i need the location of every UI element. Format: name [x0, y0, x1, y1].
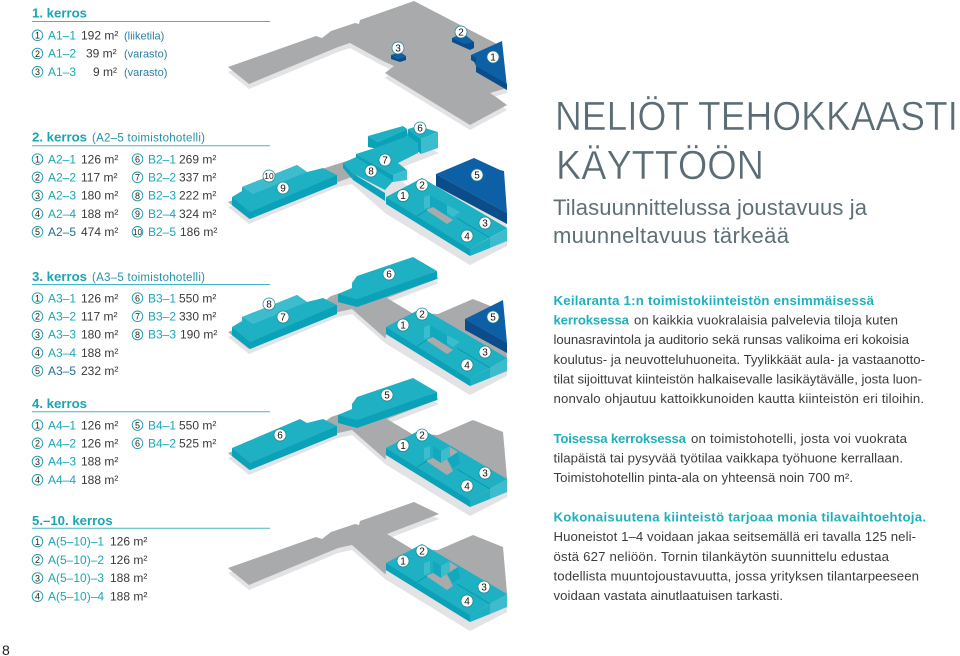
panel: floor list 2	[32, 130, 270, 239]
A wing	[385, 455, 507, 516]
floor plan: floor 4: 6	[277, 431, 283, 442]
panel: floor list 2: 126 m²	[81, 152, 118, 166]
floor plan: floor 1: 1	[490, 53, 496, 64]
floor plan: floor 3	[228, 257, 507, 395]
block 5	[436, 158, 507, 213]
panel: floor list 3: B3–1	[148, 291, 176, 305]
text block: overall	[554, 510, 926, 603]
heading: 3. kerros: (A3–5 toimistohotelli)	[92, 272, 205, 284]
panel: floor list 5-10: A(5–10)–3	[48, 571, 104, 585]
heading: 2. kerros: 2. kerros	[32, 130, 87, 145]
panel: floor list 1	[32, 6, 270, 79]
panel: floor list 3: 330 m²	[179, 310, 216, 324]
floor plan: floor 3: 3	[482, 348, 488, 359]
panel: floor list 2: 222 m²	[179, 189, 216, 203]
floor plan: floors 5-10: 2	[419, 547, 425, 558]
heading: 2. kerros: (A2–5 toimistohotelli)	[92, 133, 205, 145]
subtitle: muunneltavuus tärkeää	[553, 223, 790, 248]
panel: floor list 4: 2	[35, 439, 40, 449]
floor plan: floor 1	[228, 1, 507, 130]
floor plan: floor 2	[228, 122, 507, 265]
panel: floor list 5-10: 2	[35, 555, 40, 565]
A wing	[385, 204, 507, 265]
floor plan: floor 2: 8	[368, 167, 374, 178]
panel: floor list 1: (liiketila)	[124, 30, 164, 42]
panel: floor list 4: 525 m²	[179, 436, 216, 450]
panel: floor list 5-10: A(5–10)–4	[48, 589, 104, 603]
panel: floor list 4: 188 m²	[81, 455, 118, 469]
floor plan: floor 2: 4	[464, 232, 470, 243]
text block: overall: voidaan vastata ainutlaatuisen tarkasti.	[554, 588, 783, 603]
panel: floor list 4: 1	[35, 420, 40, 430]
panel: floor list 2: 188 m²	[81, 207, 118, 221]
floor plan: floor 4: 4	[464, 482, 470, 493]
panel: floor list 5-10: A(5–10)–2	[48, 553, 104, 567]
floor plan: floor 3: 4	[464, 361, 470, 372]
floor plan: floor 3: 5	[490, 313, 496, 324]
panel: floor list 2: 5	[35, 227, 40, 237]
block 5	[338, 378, 437, 420]
panel: floor list 2: 1	[35, 154, 40, 164]
panel: floor list 4: 188 m²	[81, 473, 118, 487]
panel: floor list 2: A2–1	[48, 152, 76, 166]
panel: floor list 2: B2–4	[148, 207, 176, 221]
panel: floor list 4: 126 m²	[81, 418, 118, 432]
panel: floor list 2: 6	[135, 154, 140, 164]
panel: floor list 4: A4–1	[48, 418, 76, 432]
panel: floor list 3: 7	[135, 312, 140, 322]
panel: floor list 2: 2	[35, 173, 40, 183]
panel: floor list 2: A2–3	[48, 189, 76, 203]
text block: second floor: Toimistohotellin pinta-ala on yhteensä noin 700 m².	[554, 470, 853, 485]
panel: floor list 4	[32, 396, 270, 487]
panel: floor list 1: A1–2	[48, 47, 76, 61]
panel: floor list 3: A3–3	[48, 328, 76, 342]
text block: first floor	[554, 293, 925, 406]
subtitle: Tilasuunnittelussa joustavuus ja	[553, 195, 868, 220]
panel: floor list 3: 3	[35, 330, 40, 340]
panel: floor list 4: B4–1	[148, 418, 176, 432]
text block: first floor: kerroksessa	[554, 313, 630, 328]
block 6	[368, 136, 378, 149]
text block: first floor: lounasravintola ja auditorio sekä runsas valikoima eri kokoisia	[554, 332, 910, 347]
panel: floor list 1: 3	[35, 67, 40, 77]
block 6	[232, 419, 337, 463]
panel: floor list 3: 190 m²	[180, 328, 217, 342]
text block: overall: östä 627 neliöön. Tornin tilankäytön suunnittelu edustaa	[554, 549, 890, 564]
panel: floor list 5-10: 1	[35, 537, 40, 547]
floor plan: floors 5-10: 4	[464, 597, 470, 608]
panel: floor list 3: 1	[35, 293, 40, 303]
floor plan: floor 3: 6	[386, 270, 392, 281]
heading: 1. kerros: 1. kerros	[32, 6, 87, 21]
text block: overall: todellista muuntojoustavuutta, jossa yrityksen tilantarpeeseen	[554, 568, 919, 583]
panel: floor list 1: 192 m²	[81, 28, 118, 42]
block 7	[356, 136, 418, 175]
panel: floor list 5-10: 3	[35, 573, 40, 583]
A wing	[385, 334, 507, 395]
floor plan: floor 2: 3	[482, 219, 488, 230]
panel: floor list 3: 4	[35, 348, 40, 358]
panel: floor list 2: 7	[135, 173, 140, 183]
text block: first floor: nonvalo ohjautuu kattoikkunoiden kautta kiinteistön eri tiloihin.	[554, 391, 924, 406]
floor plan: floor 2: 2	[419, 181, 425, 192]
floor plan: floor 2: 6	[417, 124, 423, 135]
text block: first floor: tilat sijoittuvat kiinteistön halkaisevalle lasikäytävälle, josta luon-	[554, 371, 922, 386]
panel: floor list 2: 324 m²	[179, 207, 216, 221]
floor plan: floors 5-10: 3	[481, 583, 487, 594]
block 6	[338, 257, 437, 299]
panel: floor list 1: A1–3	[48, 65, 76, 79]
panel: floor list 1: 9 m²	[93, 65, 117, 79]
panel: floor list 1: (varasto)	[124, 67, 167, 79]
panel: floor list 3: 180 m²	[81, 328, 118, 342]
floor plan: floor 2: 9	[280, 184, 286, 195]
panel: floor list 5-10: 4	[35, 592, 40, 602]
panel: floor list 3: B3–2	[148, 310, 176, 324]
blocks 9 and 10	[232, 165, 337, 212]
panel: floor list 2: 4	[35, 209, 40, 219]
panel: floor list 3: 550 m²	[179, 291, 216, 305]
panel: floor list 3: 188 m²	[81, 346, 118, 360]
floor plan: floors 5-10: 1	[400, 557, 406, 568]
panel: floor list 5-10: 188 m²	[110, 589, 147, 603]
floor plan: floors 5-10	[228, 502, 507, 631]
panel: floor list 3: A3–4	[48, 346, 76, 360]
title	[555, 93, 958, 188]
text block: overall: Huoneistot 1–4 voidaan jakaa seitsemällä eri tavalla 125 neli-	[554, 529, 916, 544]
subtitle	[553, 195, 868, 248]
panel: floor list 5-10: 126 m²	[110, 535, 147, 549]
panel: floor list 2: 180 m²	[81, 189, 118, 203]
panel: floor list 2: 269 m²	[179, 152, 216, 166]
panel: floor list 4: B4–2	[148, 436, 176, 450]
panel: floor list 2: B2–5	[148, 225, 176, 239]
text block: second floor: on toimistohotelli, josta voi vuokrata	[691, 431, 908, 446]
panel: floor list 3: 126 m²	[81, 291, 118, 305]
panel: floor list 5-10	[32, 513, 270, 603]
block 8	[343, 157, 393, 190]
text block: overall: Kokonaisuutena kiinteistö tarjoaa monia tilavaihtoehtoja.	[554, 510, 926, 525]
A wing	[385, 570, 507, 631]
floor plan: floor 1: 3	[395, 44, 401, 55]
text block: second floor: Toisessa kerroksessa	[554, 431, 687, 446]
text block: first floor: Keilaranta 1:n toimistokiinteistön ensimmäisessä	[554, 293, 875, 308]
floor plan: floor 3: 1	[400, 321, 406, 332]
panel: floor list 2: 186 m²	[180, 225, 217, 239]
panel: floor list 3: 6	[135, 293, 140, 303]
panel: floor list 3: A3–5	[48, 364, 76, 378]
text block: first floor: koulutus- ja neuvotteluhuoneita. Tyylikkäät aula- ja vastaanotto-	[554, 352, 925, 367]
panel: floor list 3: 117 m²	[81, 310, 117, 324]
floor plan: floor 4: 3	[482, 469, 488, 480]
floor plan: floor 3: 2	[419, 310, 425, 321]
panel: floor list 1: A1–1	[48, 28, 76, 42]
panel: floor list 3: 5	[35, 366, 40, 376]
floor plan: floor 2: 1	[400, 191, 406, 202]
panel: floor list 3	[32, 269, 270, 378]
panel: floor list 5-10: 188 m²	[110, 571, 147, 585]
panel: floor list 2: A2–5	[48, 225, 76, 239]
floor plan: floor 4: 5	[384, 391, 390, 402]
panel: floor list 4: 550 m²	[179, 418, 216, 432]
text block: first floor: on kaikkia vuokralaisia palvelevia tiloja kuten	[634, 313, 898, 328]
floor plan: floor 1: 2	[458, 28, 464, 39]
heading: 5.–10. kerros: 5.–10. kerros	[32, 513, 113, 528]
blocks 7 and 8	[232, 295, 337, 342]
panel: floor list 2: B2–2	[148, 170, 176, 184]
heading: 3. kerros: 3. kerros	[32, 269, 87, 284]
panel: floor list 3: 2	[35, 312, 40, 322]
panel: floor list 1: (varasto)	[124, 49, 167, 61]
panel: floor list 2: 337 m²	[179, 170, 216, 184]
panel: floor list 4: A4–3	[48, 455, 76, 469]
panel: floor list 4: 5	[135, 420, 140, 430]
panel: floor list 2: 9	[135, 209, 140, 219]
panel: floor list 4: 6	[135, 439, 140, 449]
panel: floor list 2: 10	[133, 228, 142, 237]
panel: floor list 4: 126 m²	[81, 436, 118, 450]
floor plan: floor 4	[228, 378, 507, 516]
panel: floor list 3: 8	[135, 330, 140, 340]
panel: floor list 1: 1	[35, 31, 40, 41]
panel: floor list 2: B2–3	[148, 189, 176, 203]
text block: second floor	[554, 431, 908, 485]
title: KÄYTTÖÖN	[556, 142, 764, 188]
floor plan: floor 3: 8	[266, 300, 272, 311]
floor plan: floor 2: 10	[264, 171, 274, 181]
panel: floor list 2: 3	[35, 191, 40, 201]
panel: floor list 4: 4	[35, 475, 40, 485]
panel: floor list 2: 117 m²	[81, 170, 117, 184]
panel: floor list 1: 39 m²	[86, 47, 117, 61]
floor plan: floor 4: 2	[419, 431, 425, 442]
panel: floor list 2: A2–4	[48, 207, 76, 221]
heading: 4. kerros: 4. kerros	[32, 396, 87, 411]
panel: floor list 2: 8	[135, 191, 140, 201]
floor plan: floor 4: 1	[400, 441, 406, 452]
panel: floor list 3: A3–1	[48, 291, 76, 305]
floor plan: floor 3: 7	[280, 313, 286, 324]
block 5	[465, 300, 507, 343]
floor plan: floor 2: 7	[382, 156, 388, 167]
panel: floor list 3: B3–3	[148, 328, 176, 342]
panel: floor list 2: A2–2	[48, 170, 76, 184]
panel: floor list 4: A4–4	[48, 473, 76, 487]
panel: floor list 4: A4–2	[48, 436, 76, 450]
panel: floor list 5-10: A(5–10)–1	[48, 535, 104, 549]
floor plan: floor 2: 5	[474, 171, 480, 182]
panel: floor list 2: 474 m²	[81, 225, 118, 239]
panel: floor list 5-10: 126 m²	[110, 553, 147, 567]
panel: floor list 3: A3–2	[48, 310, 76, 324]
panel: floor list 3: 232 m²	[81, 364, 118, 378]
panel: floor list 4: 3	[35, 457, 40, 467]
panel: floor list 2: B2–1	[148, 152, 176, 166]
text block: second floor: tilapäistä tai pysyvää työtilaa vaikkapa työhuone kerrallaan.	[554, 450, 903, 465]
panel: floor list 1: 2	[35, 49, 40, 59]
